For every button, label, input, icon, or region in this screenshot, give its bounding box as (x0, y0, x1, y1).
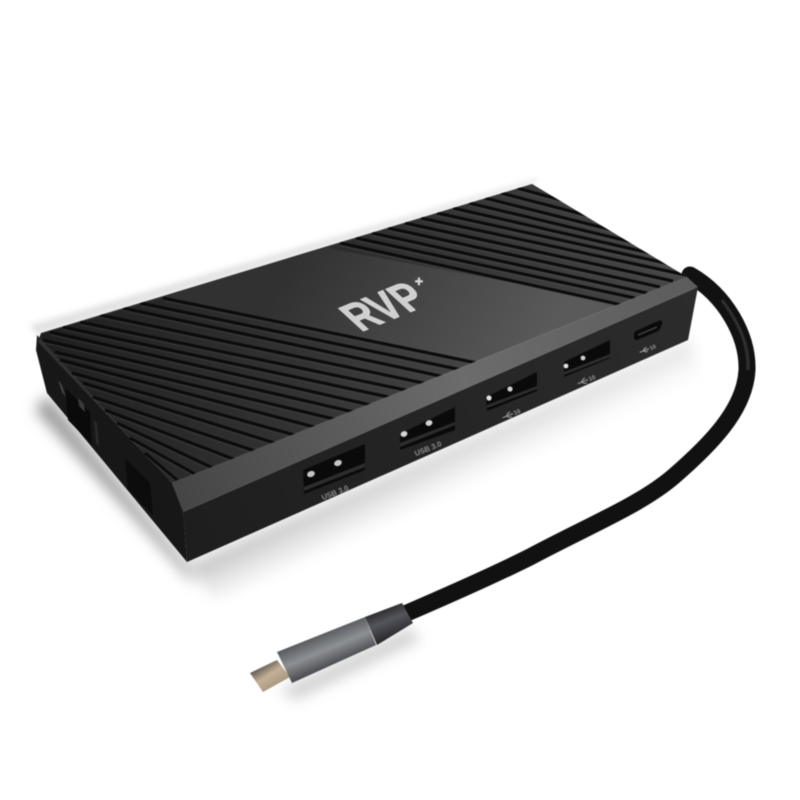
cable (407, 275, 748, 613)
RVP+ logo: RVP (329, 275, 439, 340)
hub front face (183, 287, 698, 562)
USB port 3: 10 (513, 409, 522, 417)
hub left side face (36, 335, 187, 562)
front top bevel (172, 277, 698, 512)
USB port 4 (564, 340, 610, 387)
shadows and reflection under the hub (30, 178, 700, 700)
USB-C port (634, 320, 662, 356)
hub top face centre panel (38, 184, 687, 483)
left ribbed area (37, 298, 477, 483)
product illustration: RVP+ USB-C docking hub (30, 180, 756, 704)
USB 3.0 port 1: USB 3.0 (320, 483, 350, 502)
left side ports (58, 380, 153, 515)
right ribbed area (332, 184, 686, 306)
connector metal body (277, 617, 376, 683)
USB-C port: 10 (649, 344, 657, 352)
USB port 4: 10 (588, 375, 597, 383)
USB 3.0 port 2: USB 3.0 (413, 439, 443, 458)
USB port 3 (486, 372, 537, 421)
connector boot (365, 603, 413, 645)
USB-C connector tip (250, 660, 290, 692)
RVP+ logo: + (415, 273, 423, 289)
USB 3.0 port 1 (303, 444, 365, 502)
USB 3.0 port 2 (400, 407, 455, 458)
